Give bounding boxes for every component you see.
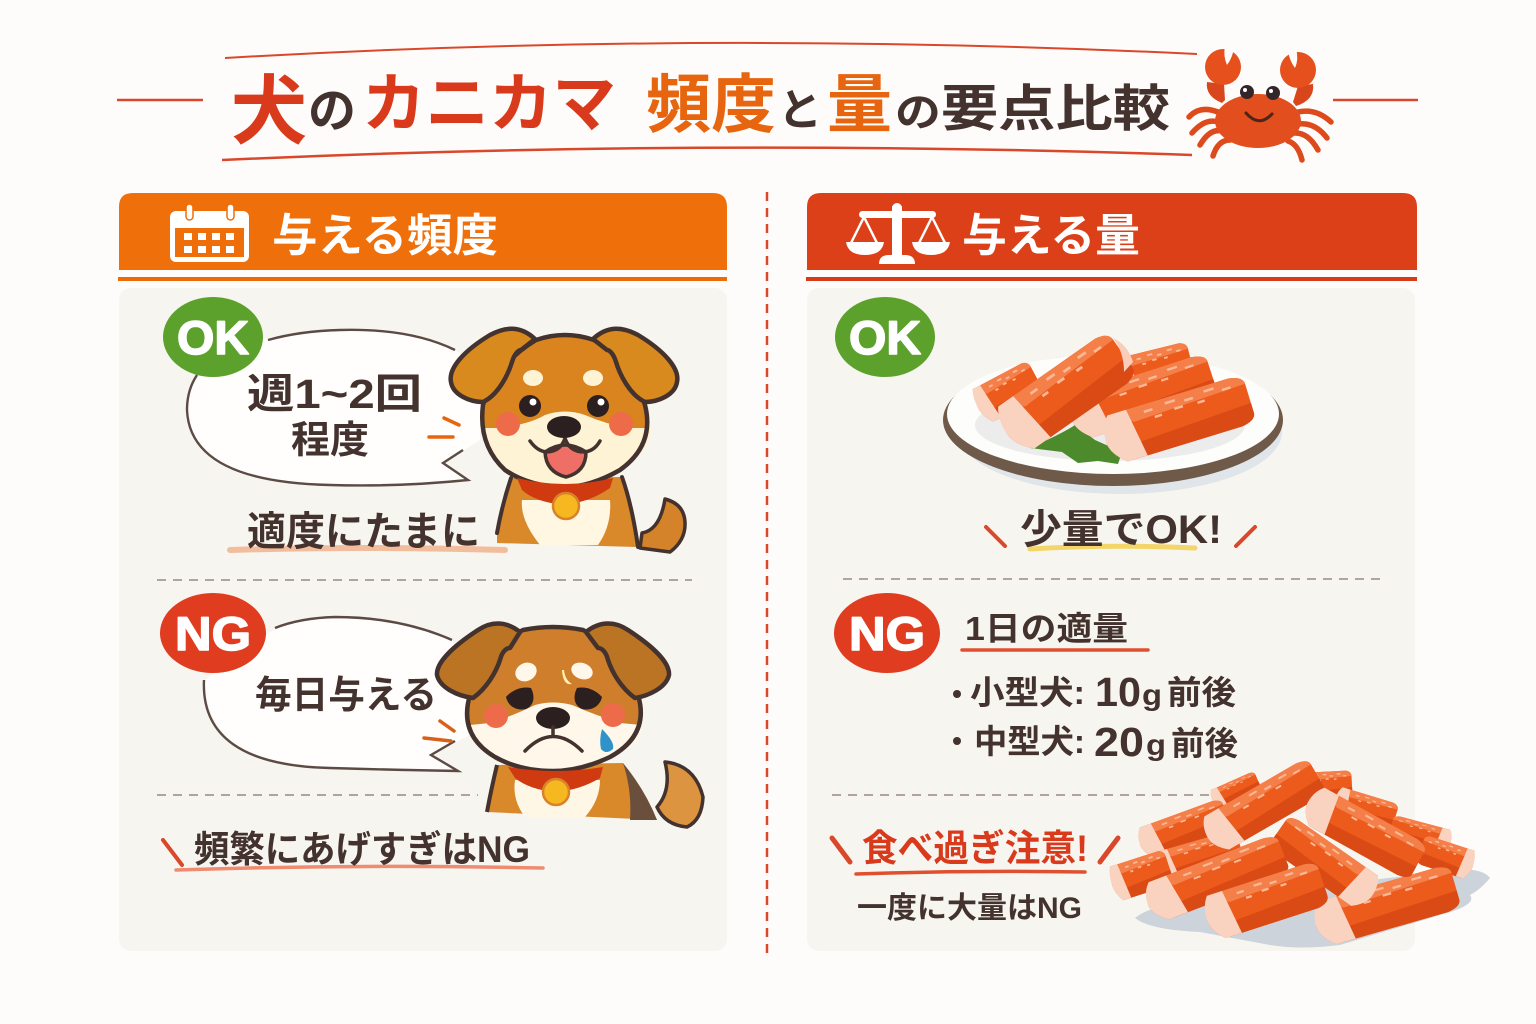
- illustration: happy dog: [451, 329, 685, 552]
- text: medium dog amount: 20: [1094, 719, 1144, 765]
- panel: frequency: [118, 193, 727, 951]
- badge: OK amount: OK: [849, 311, 921, 364]
- title: と: [778, 86, 822, 135]
- text: small dog amount: 小型犬:: [970, 674, 1085, 711]
- header: amount: [806, 193, 1417, 281]
- speech bubble: NG: [204, 617, 470, 771]
- text: overeating warning: 一度に大量はNG: [857, 892, 1082, 925]
- speech bubble: OK: [187, 330, 480, 485]
- illustration: pile of crab sticks: [1106, 757, 1490, 948]
- title: の: [308, 85, 356, 138]
- text: daily amount heading: 1日の適量: [965, 610, 1128, 647]
- title: 犬: [231, 70, 307, 155]
- text: overeating warning: 食べ過ぎ注意!: [862, 828, 1088, 869]
- panel: amount: [806, 193, 1490, 951]
- badge: OK frequency: [163, 297, 263, 377]
- text: medium dog amount: 中型犬:: [974, 723, 1085, 760]
- text: small dog amount: 前後: [1167, 674, 1236, 711]
- badge: OK frequency: OK: [177, 311, 249, 364]
- title: 頻度: [646, 69, 776, 141]
- text: overeating warning: [832, 828, 1118, 925]
- header: amount: 与える量: [962, 210, 1140, 261]
- text: small amount OK: 少量でOK!: [1020, 508, 1222, 552]
- speech bubble: NG: 毎日与える: [255, 675, 437, 717]
- badge: NG frequency: NG: [175, 607, 251, 660]
- badge: NG frequency: [160, 593, 266, 673]
- badge: NG amount: [834, 593, 940, 673]
- badge: OK amount: [835, 297, 935, 377]
- illustration: sad dog: [437, 624, 703, 827]
- speech bubble: OK: 程度: [291, 420, 369, 462]
- title: [117, 43, 1418, 160]
- text: small dog amount: g: [1142, 679, 1162, 712]
- header: frequency: [118, 193, 727, 281]
- text: medium dog amount: [953, 719, 1238, 765]
- illustration: plate of crab sticks: [943, 331, 1283, 494]
- text: too frequent is NG: 頻繁にあげすぎはNG: [194, 829, 530, 870]
- text: medium dog amount: 前後: [1171, 725, 1238, 762]
- icon: crab: [1189, 46, 1331, 160]
- header: frequency: 与える頻度: [272, 210, 498, 261]
- text: small dog amount: 10: [1095, 669, 1141, 715]
- title: の要点比較: [895, 81, 1170, 137]
- text: moderate occasionally: 適度にたまに: [247, 510, 480, 554]
- title: 量: [827, 69, 892, 141]
- badge: NG amount: NG: [849, 607, 925, 660]
- center divider: [766, 192, 768, 955]
- text: medium dog amount: g: [1146, 729, 1166, 762]
- title: カニカマ: [362, 68, 616, 140]
- speech bubble: OK: 週1~2回: [247, 371, 422, 417]
- text: small dog amount: [953, 669, 1236, 715]
